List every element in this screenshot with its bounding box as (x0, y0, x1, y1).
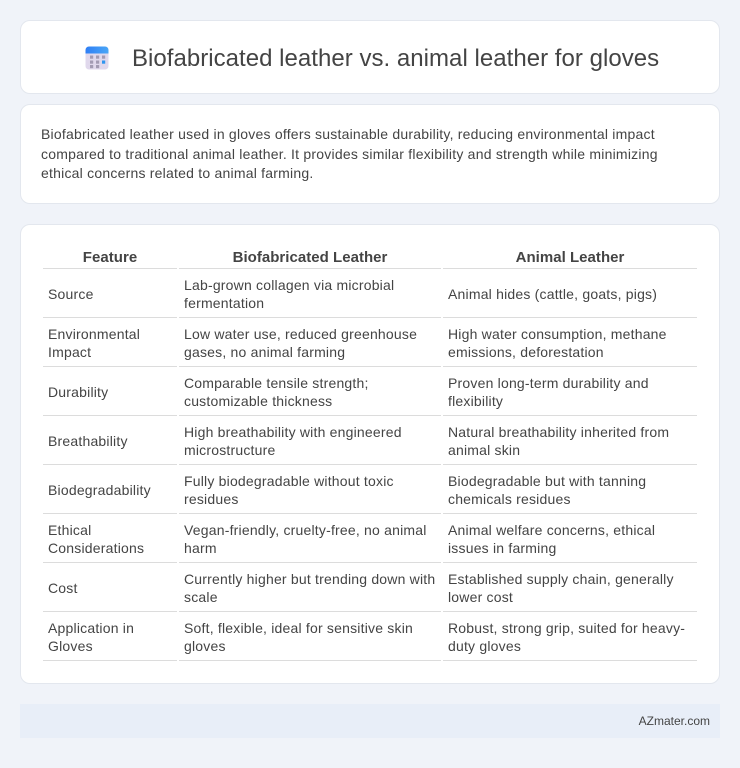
Source: biofabricated: Lab-grown collagen via microbial (184, 277, 394, 293)
Ethical Considerations: biofabricated: Vegan-friendly, cruelty-free, no animal (184, 522, 427, 538)
Ethical Considerations: biofabricated (184, 522, 427, 556)
Breathability: animal (448, 424, 669, 458)
Application in Gloves: animal (448, 620, 685, 654)
Breathability: biofabricated (184, 424, 402, 458)
Breathability: biofabricated: microstructure (184, 442, 275, 458)
Durability: biofabricated: customizable thickness (184, 393, 332, 409)
panel: comparison table (20, 224, 720, 684)
row: Environmental Impact: Impact (48, 344, 91, 360)
column heading: Animal Leather: Animal Leather (516, 249, 624, 266)
icon: calendar (86, 46, 108, 70)
Durability: animal: Proven long-term durability and (448, 375, 649, 391)
Ethical Considerations: animal: Animal welfare concerns, ethical (448, 522, 655, 538)
row: Biodegradability: Biodegradability (48, 482, 151, 498)
Environmental Impact: animal: High water consumption, methane (448, 326, 667, 342)
Application in Gloves: biofabricated: gloves (184, 638, 226, 654)
row: Environmental Impact (48, 326, 140, 360)
row: Durability: Durability (48, 384, 108, 400)
column heading: Feature: Feature (83, 249, 137, 266)
Breathability: animal: animal skin (448, 442, 520, 458)
Biodegradability: biofabricated: Fully biodegradable without toxic (184, 473, 394, 489)
Environmental Impact: biofabricated: gases, no animal farming (184, 344, 345, 360)
column heading: Biofabricated Leather: Biofabricated Leather (233, 249, 387, 266)
row: Cost: Cost (48, 580, 78, 596)
row: Breathability: Breathability (48, 433, 128, 449)
row: Ethical Considerations (48, 522, 144, 556)
row: Application in Gloves (48, 620, 134, 654)
intro panel (20, 104, 720, 204)
title: Biofabricated leather vs. animal leather for gloves (132, 45, 659, 72)
Source: animal: Animal hides (cattle, goats, pigs) (448, 286, 657, 302)
intro text: compared to traditional animal leather. It provides similar flexibility and strength while minimizing (41, 146, 658, 162)
Source: biofabricated (184, 277, 394, 311)
row: Ethical Considerations: Ethical (48, 522, 91, 538)
Durability: animal (448, 375, 649, 409)
footer bar (20, 704, 720, 738)
row: Ethical Considerations: Considerations (48, 540, 144, 556)
Cost: biofabricated: scale (184, 589, 218, 605)
Environmental Impact: biofabricated (184, 326, 417, 360)
Application in Gloves: animal: duty gloves (448, 638, 521, 654)
Biodegradability: biofabricated (184, 473, 394, 507)
Ethical Considerations: biofabricated: harm (184, 540, 217, 556)
Breathability: biofabricated: High breathability with engineered (184, 424, 402, 440)
Biodegradability: animal (448, 473, 646, 507)
row: Application in Gloves: Application in (48, 620, 134, 636)
Cost: animal: Established supply chain, generally (448, 571, 674, 587)
Biodegradability: biofabricated: residues (184, 491, 239, 507)
row: Source: Source (48, 286, 94, 302)
Ethical Considerations: animal (448, 522, 655, 556)
Environmental Impact: animal: emissions, deforestation (448, 344, 604, 360)
Application in Gloves: animal: Robust, strong grip, suited for heavy- (448, 620, 685, 636)
Application in Gloves: biofabricated: Soft, flexible, ideal for sensitive skin (184, 620, 413, 636)
intro text: Biofabricated leather used in gloves offers sustainable durability, reducing environmental impact (41, 126, 655, 142)
Biodegradability: animal: Biodegradable but with tanning (448, 473, 646, 489)
Environmental Impact: animal (448, 326, 667, 360)
row: Application in Gloves: Gloves (48, 638, 93, 654)
Ethical Considerations: animal: issues in farming (448, 540, 556, 556)
intro text (41, 126, 658, 181)
Cost: animal: lower cost (448, 589, 513, 605)
title card (20, 20, 720, 94)
Source: biofabricated: fermentation (184, 295, 264, 311)
Breathability: animal: Natural breathability inherited from (448, 424, 669, 440)
Application in Gloves: biofabricated (184, 620, 413, 654)
Biodegradability: animal: chemicals residues (448, 491, 571, 507)
Environmental Impact: biofabricated: Low water use, reduced greenhouse (184, 326, 417, 342)
intro text: ethical concerns related to animal farming. (41, 165, 313, 181)
Cost: biofabricated: Currently higher but trending down with (184, 571, 435, 587)
row: Environmental Impact: Environmental (48, 326, 140, 342)
Cost: animal (448, 571, 674, 605)
Durability: biofabricated: Comparable tensile strength; (184, 375, 369, 391)
Durability: biofabricated (184, 375, 369, 409)
Cost: biofabricated (184, 571, 435, 605)
Durability: animal: flexibility (448, 393, 503, 409)
footer credit: AZmater.com (639, 714, 710, 728)
